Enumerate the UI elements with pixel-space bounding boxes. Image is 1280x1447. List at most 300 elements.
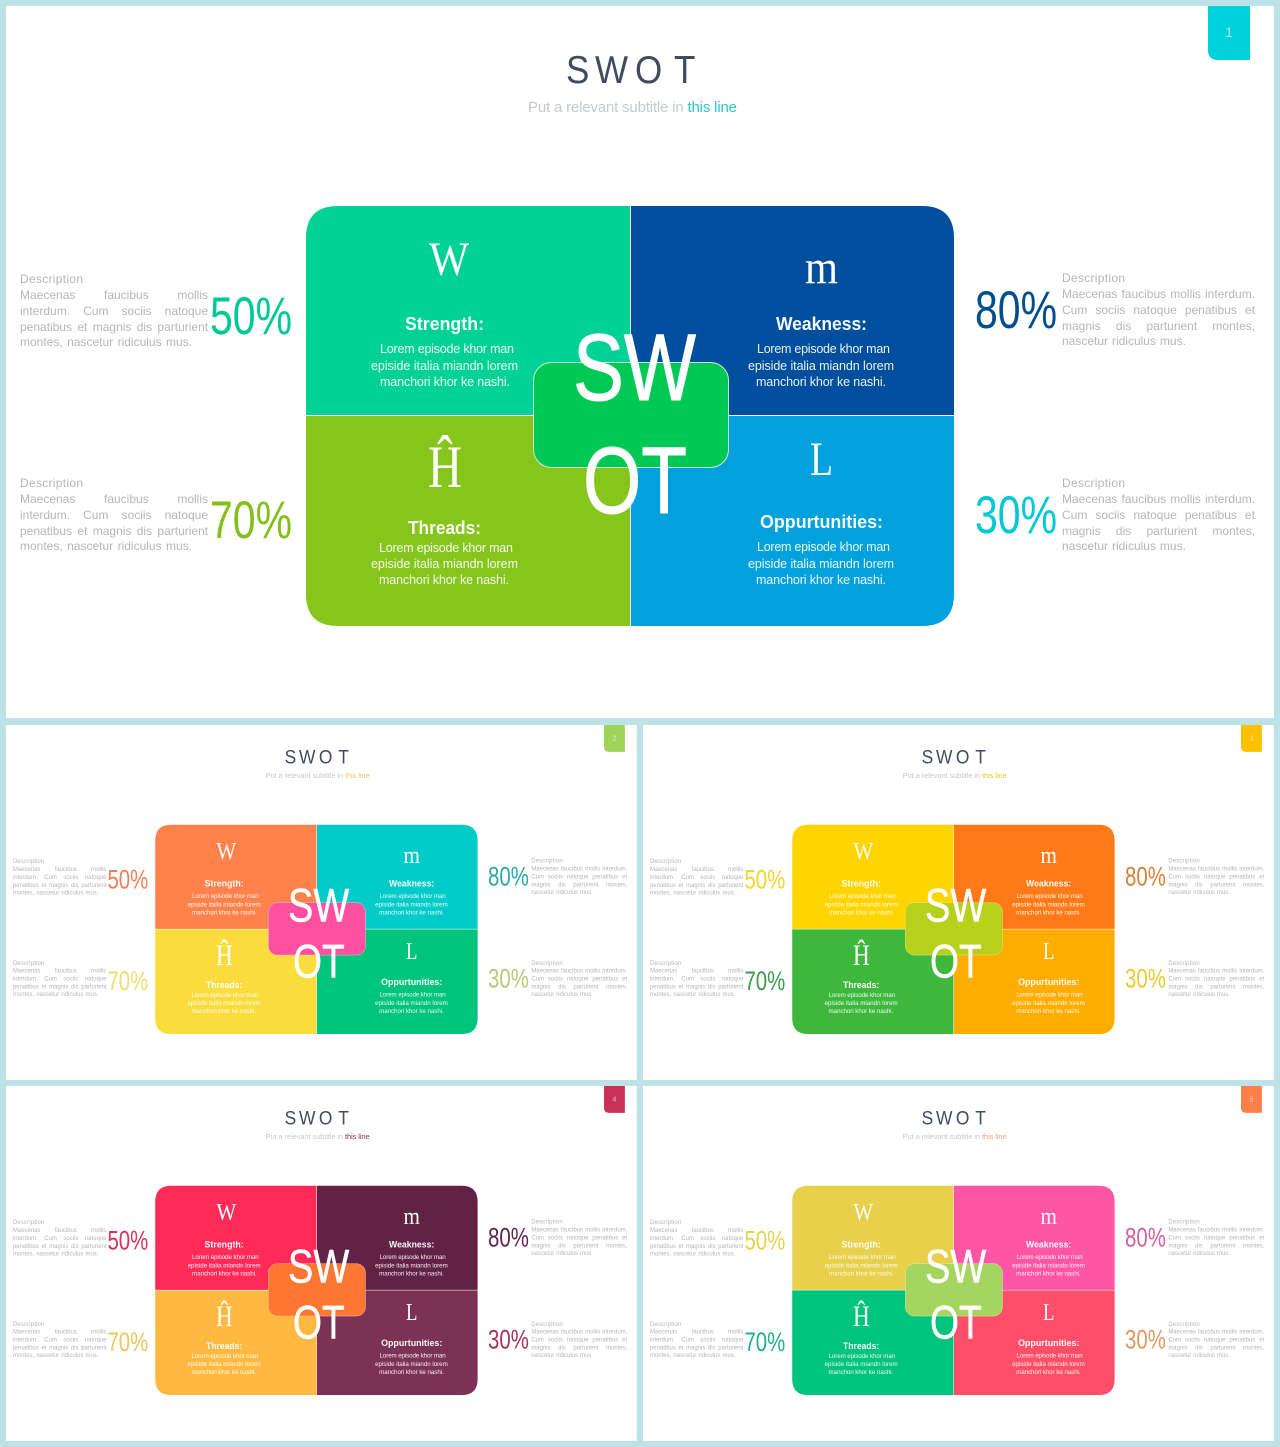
subtitle: Put a relevant subtitle in this line bbox=[528, 99, 737, 116]
center label SW OT bbox=[925, 1240, 987, 1350]
center label SW OT bbox=[925, 879, 987, 989]
page tab 5 bbox=[1241, 1086, 1262, 1113]
stat 30%: 30% bbox=[488, 964, 529, 994]
left description bottom: interdum. Cum sociis natoque bbox=[13, 977, 107, 983]
left description bottom: penatibus et magnis dis parturient bbox=[13, 985, 107, 991]
center label SW OT: SW bbox=[573, 315, 696, 421]
quadrant: strength: W bbox=[429, 233, 470, 286]
page tab 3 bbox=[1241, 725, 1262, 752]
page tab 1: 1 bbox=[1225, 24, 1233, 40]
left description bottom: Maecenas faucibus mollis bbox=[20, 492, 208, 506]
quadrant: strength: manchori khor ke nashi. bbox=[380, 375, 510, 389]
right description top: Cum sociis natoque penatibus et bbox=[531, 1236, 628, 1242]
quadrant: opportunities: Lorem episode khor man bbox=[380, 1353, 446, 1360]
left description bottom bbox=[20, 476, 209, 553]
stat 50%: 50% bbox=[107, 864, 148, 895]
right description top: Cum sociis natoque penatibus et bbox=[1168, 1236, 1265, 1242]
right description bottom: Maecenas faucibus mollis interdum. bbox=[531, 1330, 628, 1336]
quadrant: threads: Ĥ bbox=[428, 434, 462, 500]
quadrant: opportunities: manchori khor ke nashi. bbox=[1016, 1369, 1081, 1376]
right description top: Cum sociis natoque penatibus et bbox=[1168, 875, 1265, 881]
right description top: magnis dis parturient montes, bbox=[1168, 883, 1265, 889]
panel: slide 3 bbox=[643, 725, 1274, 1080]
subtitle: Put a relevant subtitle in this line bbox=[903, 771, 1007, 780]
quadrant: weakness: Lorem episode khor man bbox=[757, 342, 890, 356]
left description bottom: Description bbox=[13, 1322, 44, 1328]
right description bottom: Cum sociis natoque penatibus et bbox=[531, 977, 628, 983]
left description bottom: Description bbox=[20, 476, 83, 490]
right description bottom: nascetur ridiculus mus. bbox=[531, 1353, 593, 1359]
quadrant: threads: manchori khor ke nashi. bbox=[829, 1008, 893, 1015]
quadrant: weakness bbox=[631, 206, 954, 415]
right description bottom bbox=[1168, 1322, 1265, 1359]
right description top: nascetur ridiculus mus. bbox=[1168, 1251, 1230, 1257]
quadrant: weakness bbox=[954, 825, 1115, 929]
center label SW OT bbox=[288, 1240, 350, 1350]
right description top: magnis dis parturient montes, bbox=[531, 1244, 628, 1250]
quadrant: strength: Lorem episode khor man bbox=[829, 1254, 896, 1261]
left description bottom: montes, nascetur ridiculus mus. bbox=[13, 1353, 99, 1359]
panel: slide 2 bbox=[6, 725, 637, 1080]
quadrant: weakness: Weakness: bbox=[776, 314, 867, 334]
quadrant: strength: episide italia miandn lorem bbox=[825, 1262, 898, 1269]
right description top: nascetur ridiculus mus. bbox=[1062, 334, 1186, 348]
quadrant: strength: manchori khor ke nashi. bbox=[192, 1270, 257, 1277]
quadrant: strength: episide italia miandn lorem bbox=[188, 1262, 261, 1269]
left description bottom bbox=[13, 961, 107, 998]
quadrant: opportunities: manchori khor ke nashi. bbox=[1016, 1008, 1081, 1015]
left description bottom: montes, nascetur ridiculus mus. bbox=[20, 539, 192, 553]
stat 30%: 30% bbox=[488, 1325, 529, 1355]
right description bottom bbox=[1062, 476, 1256, 553]
quadrant: strength: manchori khor ke nashi. bbox=[829, 1270, 894, 1277]
left description bottom: montes, nascetur ridiculus mus. bbox=[13, 992, 99, 998]
quadrant: threads bbox=[792, 929, 953, 1034]
quadrant: opportunities: Lorem episode khor man bbox=[380, 992, 446, 999]
left description bottom bbox=[13, 1322, 107, 1359]
quadrant: opportunities: L bbox=[1043, 939, 1054, 965]
right description bottom bbox=[1168, 961, 1265, 998]
right description top: Description bbox=[531, 859, 563, 865]
quadrant: strength bbox=[792, 1186, 953, 1290]
quadrant: threads: manchori khor ke nashi. bbox=[379, 573, 509, 587]
right description top: Maecenas faucibus mollis interdum. bbox=[531, 867, 628, 873]
quadrant: strength: episide italia miandn lorem bbox=[188, 901, 261, 908]
left description top: interdum. Cum sociis natoque bbox=[650, 875, 744, 881]
stat 50%: 50% bbox=[210, 287, 292, 346]
panel: slide 4 bbox=[6, 1086, 637, 1441]
left description top bbox=[13, 859, 107, 896]
left description bottom: Maecenas faucibus mollis bbox=[650, 969, 743, 975]
center label SW OT: OT bbox=[930, 1297, 982, 1350]
center label SW OT: SW bbox=[925, 1240, 987, 1293]
quadrant: weakness: episide italia miandn lorem bbox=[1012, 901, 1085, 908]
quadrant: strength: Lorem episode khor man bbox=[192, 1254, 259, 1261]
left description top: interdum. Cum sociis natoque bbox=[13, 1236, 107, 1242]
right description top: Description bbox=[1168, 859, 1200, 865]
right description bottom: nascetur ridiculus mus. bbox=[1168, 1353, 1230, 1359]
quadrant: opportunities: L bbox=[406, 939, 417, 965]
right description top: magnis dis parturient montes, bbox=[1168, 1244, 1265, 1250]
stat 30%: 30% bbox=[975, 486, 1057, 545]
stat 70%: 70% bbox=[107, 1327, 148, 1357]
quadrant: threads: Lorem episode khor man bbox=[192, 992, 259, 999]
quadrant: opportunities: manchori khor ke nashi. bbox=[756, 573, 886, 587]
left description top bbox=[650, 859, 744, 896]
quadrant: strength: Lorem episode khor man bbox=[380, 342, 514, 356]
left description top bbox=[650, 1220, 744, 1257]
quadrant: weakness bbox=[954, 1186, 1115, 1290]
stat 80%: 80% bbox=[488, 1222, 529, 1253]
left description top: interdum. Cum sociis natoque bbox=[13, 875, 107, 881]
quadrant: weakness: Weakness: bbox=[1026, 1239, 1071, 1250]
quadrant: threads: manchori khor ke nashi. bbox=[829, 1369, 893, 1376]
quadrant: weakness: episide italia miandn lorem bbox=[1012, 1262, 1085, 1269]
quadrant: opportunities: Lorem episode khor man bbox=[1017, 992, 1083, 999]
right description bottom: Description bbox=[1168, 961, 1200, 967]
quadrant: opportunities bbox=[954, 929, 1115, 1034]
right description bottom: Description bbox=[531, 961, 563, 967]
quadrant: strength: Strength: bbox=[204, 878, 244, 889]
center badge bbox=[534, 362, 728, 468]
stat 70%: 70% bbox=[210, 491, 292, 550]
right description top: Description bbox=[1062, 271, 1125, 285]
page tab 4: 4 bbox=[612, 1096, 616, 1103]
left description top: penatibus et magnis dis parturient bbox=[13, 1244, 107, 1250]
right description bottom: Maecenas faucibus mollis interdum. bbox=[1168, 1330, 1265, 1336]
quadrant: threads bbox=[155, 1290, 316, 1395]
quadrant: threads: episide italia miandn lorem bbox=[188, 1361, 261, 1368]
quadrant: weakness bbox=[317, 1186, 478, 1290]
center badge bbox=[268, 1264, 365, 1316]
stat 50%: 50% bbox=[107, 1225, 148, 1256]
left description bottom bbox=[650, 961, 744, 998]
title: S W O T bbox=[285, 1107, 349, 1129]
right description top bbox=[1168, 859, 1265, 896]
stat 50%: 50% bbox=[744, 864, 785, 895]
quadrant: weakness: episide italia miandn lorem bbox=[375, 901, 448, 908]
quadrant: weakness: Weakness: bbox=[1026, 878, 1071, 889]
center label SW OT: OT bbox=[930, 936, 982, 989]
quadrant: strength: Strength: bbox=[204, 1239, 244, 1250]
right description top bbox=[1168, 1220, 1265, 1257]
left description top bbox=[13, 1220, 107, 1257]
left description top: penatibus et magnis dis parturient bbox=[650, 883, 744, 889]
quadrant: strength: W bbox=[216, 1200, 237, 1226]
quadrant: opportunities: episide italia miandn lorem bbox=[1012, 1361, 1085, 1368]
quadrant: opportunities: L bbox=[810, 433, 833, 486]
quadrant: threads: Lorem episode khor man bbox=[192, 1353, 259, 1360]
title: S W O T bbox=[566, 48, 695, 91]
center label SW OT bbox=[288, 879, 350, 989]
quadrant: weakness: Lorem episode khor man bbox=[380, 1254, 446, 1261]
left description top: Maecenas faucibus mollis bbox=[20, 288, 208, 302]
stat 70%: 70% bbox=[744, 1327, 785, 1357]
quadrant: opportunities bbox=[954, 1290, 1115, 1395]
quadrant: strength: manchori khor ke nashi. bbox=[829, 909, 894, 916]
quadrant: threads: manchori khor ke nashi. bbox=[192, 1008, 256, 1015]
left description top: Maecenas faucibus mollis bbox=[650, 867, 743, 873]
quadrant: strength: Lorem episode khor man bbox=[192, 893, 259, 900]
right description top bbox=[531, 1220, 628, 1257]
right description top bbox=[1062, 271, 1256, 348]
quadrant: threads bbox=[792, 1290, 953, 1395]
left description top: Description bbox=[650, 1220, 681, 1226]
quadrant: opportunities: Oppurtunities: bbox=[381, 1338, 442, 1348]
stat 30%: 30% bbox=[1125, 964, 1166, 994]
quadrant: threads: episide italia miandn lorem bbox=[825, 1361, 898, 1368]
page tab 2 bbox=[604, 725, 625, 752]
left description bottom: penatibus et magnis dis parturient bbox=[20, 524, 209, 538]
right description bottom: Maecenas faucibus mollis interdum. bbox=[1168, 969, 1265, 975]
quadrant: opportunities: episide italia miandn lorem bbox=[375, 1361, 448, 1368]
left description bottom: Maecenas faucibus mollis bbox=[650, 1330, 743, 1336]
quadrant: weakness: m bbox=[1040, 1204, 1057, 1230]
left description top: montes, nascetur ridiculus mus. bbox=[650, 890, 736, 896]
left description top: penatibus et magnis dis parturient bbox=[20, 320, 209, 334]
right description bottom: Maecenas faucibus mollis interdum. bbox=[531, 969, 628, 975]
center label SW OT bbox=[573, 315, 696, 534]
stat 80%: 80% bbox=[1125, 861, 1166, 892]
quadrant: weakness: Weakness: bbox=[389, 878, 434, 889]
left description bottom: interdum. Cum sociis natoque bbox=[650, 1338, 744, 1344]
quadrant: weakness: Lorem episode khor man bbox=[380, 893, 446, 900]
right description bottom: magnis dis parturient montes, bbox=[531, 985, 628, 991]
left description top: montes, nascetur ridiculus mus. bbox=[13, 1251, 99, 1257]
right description bottom: magnis dis parturient montes, bbox=[1168, 1346, 1265, 1352]
subtitle: Put a relevant subtitle in this line bbox=[266, 771, 370, 780]
quadrant: threads: episide italia miandn lorem bbox=[188, 1000, 261, 1007]
quadrant: opportunities: episide italia miandn lorem bbox=[748, 557, 894, 571]
right description top: nascetur ridiculus mus. bbox=[531, 1251, 593, 1257]
quadrant: threads: Lorem episode khor man bbox=[379, 541, 513, 555]
left description top: interdum. Cum sociis natoque bbox=[20, 304, 208, 318]
quadrant: weakness: manchori khor ke nashi. bbox=[1016, 1270, 1081, 1277]
stat 80%: 80% bbox=[1125, 1222, 1166, 1253]
left description bottom bbox=[650, 1322, 744, 1359]
right description bottom: Description bbox=[1168, 1322, 1200, 1328]
center label SW OT: OT bbox=[293, 1297, 345, 1350]
right description bottom bbox=[531, 1322, 628, 1359]
quadrant: weakness: episide italia miandn lorem bbox=[375, 1262, 448, 1269]
right description top: Maecenas faucibus mollis interdum. bbox=[531, 1228, 628, 1234]
right description bottom bbox=[531, 961, 628, 998]
quadrant: strength: episide italia miandn lorem bbox=[825, 901, 898, 908]
right description top: Cum sociis natoque penatibus et bbox=[1062, 303, 1256, 317]
quadrant: opportunities: Oppurtunities: bbox=[1018, 1338, 1079, 1348]
center label SW OT: OT bbox=[293, 936, 345, 989]
left description top: Maecenas faucibus mollis bbox=[13, 1228, 106, 1234]
stat 30%: 30% bbox=[1125, 1325, 1166, 1355]
center label SW OT: OT bbox=[583, 428, 687, 534]
subtitle: Put a relevant subtitle in this line bbox=[903, 1132, 1007, 1141]
right description bottom: Cum sociis natoque penatibus et bbox=[1168, 977, 1265, 983]
right description bottom: Cum sociis natoque penatibus et bbox=[531, 1338, 628, 1344]
center badge bbox=[268, 903, 365, 955]
left description top: montes, nascetur ridiculus mus. bbox=[13, 890, 99, 896]
quadrant: strength bbox=[155, 825, 316, 929]
quadrant: threads: Threads: bbox=[206, 1341, 242, 1351]
left description bottom: interdum. Cum sociis natoque bbox=[650, 977, 744, 983]
quadrant: strength: Strength: bbox=[841, 1239, 881, 1250]
left description bottom: penatibus et magnis dis parturient bbox=[650, 985, 744, 991]
left description top: Description bbox=[13, 1220, 44, 1226]
page tab 1 bbox=[1208, 6, 1250, 60]
left description bottom: penatibus et magnis dis parturient bbox=[650, 1346, 744, 1352]
left description bottom: interdum. Cum sociis natoque bbox=[20, 508, 208, 522]
quadrant: strength: manchori khor ke nashi. bbox=[192, 909, 257, 916]
right description bottom: magnis dis parturient montes, bbox=[1062, 524, 1255, 538]
quadrant: strength: Lorem episode khor man bbox=[829, 893, 896, 900]
quadrant: threads: Threads: bbox=[843, 980, 879, 990]
page tab 4 bbox=[604, 1086, 625, 1113]
left description top: montes, nascetur ridiculus mus. bbox=[650, 1251, 736, 1257]
quadrant: weakness: Weakness: bbox=[389, 1239, 434, 1250]
quadrant: strength: Strength: bbox=[841, 878, 881, 889]
quadrant: weakness: manchori khor ke nashi. bbox=[756, 375, 886, 389]
right description bottom: Cum sociis natoque penatibus et bbox=[1168, 1338, 1265, 1344]
quadrant: opportunities: Oppurtunities: bbox=[381, 977, 442, 987]
center label SW OT: SW bbox=[925, 879, 987, 932]
center badge bbox=[905, 1264, 1002, 1316]
quadrant: opportunities: Oppurtunities: bbox=[1018, 977, 1079, 987]
quadrant: threads: Threads: bbox=[408, 518, 481, 538]
quadrant: opportunities: manchori khor ke nashi. bbox=[379, 1369, 444, 1376]
left description bottom: Description bbox=[650, 1322, 681, 1328]
quadrant: strength bbox=[306, 206, 630, 415]
left description bottom: penatibus et magnis dis parturient bbox=[13, 1346, 107, 1352]
right description top: Maecenas faucibus mollis interdum. bbox=[1168, 867, 1265, 873]
quadrant: threads: Ĥ bbox=[853, 1300, 870, 1333]
quadrant: opportunities: episide italia miandn lorem bbox=[375, 1000, 448, 1007]
quadrant: threads: episide italia miandn lorem bbox=[825, 1000, 898, 1007]
quadrant: strength: W bbox=[853, 1200, 874, 1226]
right description bottom: nascetur ridiculus mus. bbox=[1168, 992, 1230, 998]
quadrant: opportunities: episide italia miandn lorem bbox=[1012, 1000, 1085, 1007]
left description bottom: montes, nascetur ridiculus mus. bbox=[650, 992, 736, 998]
quadrant: weakness bbox=[317, 825, 478, 929]
left description bottom: interdum. Cum sociis natoque bbox=[13, 1338, 107, 1344]
left description bottom: Description bbox=[650, 961, 681, 967]
quadrant: threads: Threads: bbox=[843, 1341, 879, 1351]
quadrant: threads: manchori khor ke nashi. bbox=[192, 1369, 256, 1376]
quadrant: threads: Threads: bbox=[206, 980, 242, 990]
quadrant: strength: W bbox=[853, 839, 874, 865]
quadrant: opportunities bbox=[317, 929, 478, 1034]
right description bottom: nascetur ridiculus mus. bbox=[531, 992, 593, 998]
left description bottom: montes, nascetur ridiculus mus. bbox=[650, 1353, 736, 1359]
right description bottom: nascetur ridiculus mus. bbox=[1062, 539, 1186, 553]
right description top: Cum sociis natoque penatibus et bbox=[531, 875, 628, 881]
left description top: Description bbox=[650, 859, 681, 865]
right description bottom: magnis dis parturient montes, bbox=[531, 1346, 628, 1352]
quadrant: opportunities bbox=[317, 1290, 478, 1395]
quadrant: opportunities bbox=[631, 416, 954, 626]
quadrant: weakness: manchori khor ke nashi. bbox=[379, 1270, 444, 1277]
right description top bbox=[531, 859, 628, 896]
quadrant: opportunities: L bbox=[406, 1300, 417, 1326]
left description top bbox=[20, 272, 209, 349]
right description top: Maecenas faucibus mollis interdum. bbox=[1062, 287, 1255, 301]
panel: slide 5 bbox=[643, 1086, 1274, 1441]
left description top: interdum. Cum sociis natoque bbox=[650, 1236, 744, 1242]
left description top: penatibus et magnis dis parturient bbox=[650, 1244, 744, 1250]
quadrant: opportunities: Oppurtunities: bbox=[760, 512, 883, 532]
left description top: Description bbox=[13, 859, 44, 865]
center label SW OT: SW bbox=[288, 1240, 350, 1293]
right description bottom: Maecenas faucibus mollis interdum. bbox=[1062, 492, 1255, 506]
quadrant: weakness: m bbox=[403, 843, 420, 869]
quadrant: weakness: manchori khor ke nashi. bbox=[379, 909, 444, 916]
quadrant: weakness: Lorem episode khor man bbox=[1017, 893, 1083, 900]
center label SW OT: SW bbox=[288, 879, 350, 932]
right description top: nascetur ridiculus mus. bbox=[1168, 890, 1230, 896]
subtitle: Put a relevant subtitle in this line bbox=[266, 1132, 370, 1141]
stat 70%: 70% bbox=[107, 966, 148, 996]
left description bottom: Description bbox=[13, 961, 44, 967]
quadrant: weakness: manchori khor ke nashi. bbox=[1016, 909, 1081, 916]
quadrant: threads: Ĥ bbox=[216, 1300, 233, 1333]
page tab 3: 3 bbox=[1249, 735, 1253, 742]
quadrant: threads: Lorem episode khor man bbox=[829, 992, 896, 999]
right description bottom: Cum sociis natoque penatibus et bbox=[1062, 508, 1256, 522]
quadrant: strength: W bbox=[216, 839, 237, 865]
left description top: Maecenas faucibus mollis bbox=[13, 867, 106, 873]
left description top: montes, nascetur ridiculus mus. bbox=[20, 335, 192, 349]
quadrant: weakness: episide italia miandn lorem bbox=[748, 359, 894, 373]
quadrant: threads bbox=[155, 929, 316, 1034]
quadrant: threads bbox=[306, 416, 630, 626]
quadrant: strength: Strength: bbox=[405, 314, 484, 334]
left description top: Description bbox=[20, 272, 83, 286]
right description top: Description bbox=[531, 1220, 563, 1226]
quadrant: weakness: Lorem episode khor man bbox=[1017, 1254, 1083, 1261]
left description top: penatibus et magnis dis parturient bbox=[13, 883, 107, 889]
quadrant: weakness: m bbox=[1040, 843, 1057, 869]
stat 80%: 80% bbox=[975, 281, 1057, 340]
quadrant: weakness: m bbox=[403, 1204, 420, 1230]
quadrant: threads: episide italia miandn lorem bbox=[371, 557, 518, 571]
stat 50%: 50% bbox=[744, 1225, 785, 1256]
right description top: Maecenas faucibus mollis interdum. bbox=[1168, 1228, 1265, 1234]
title: S W O T bbox=[922, 1107, 986, 1129]
quadrant: opportunities: Lorem episode khor man bbox=[1017, 1353, 1083, 1360]
center badge bbox=[905, 903, 1002, 955]
quadrant: opportunities: L bbox=[1043, 1300, 1054, 1326]
right description bottom: Description bbox=[531, 1322, 563, 1328]
title: S W O T bbox=[922, 746, 986, 768]
left description bottom: Maecenas faucibus mollis bbox=[13, 969, 106, 975]
page tab 5: 5 bbox=[1249, 1096, 1253, 1103]
quadrant: opportunities: Lorem episode khor man bbox=[757, 540, 890, 554]
stat 70%: 70% bbox=[744, 966, 785, 996]
quadrant: threads: Lorem episode khor man bbox=[829, 1353, 896, 1360]
stat 80%: 80% bbox=[488, 861, 529, 892]
quadrant: threads: Ĥ bbox=[853, 939, 870, 972]
panel: slide 1 bbox=[6, 6, 1274, 718]
quadrant: opportunities: manchori khor ke nashi. bbox=[379, 1008, 444, 1015]
quadrant: strength bbox=[792, 825, 953, 929]
quadrant: strength bbox=[155, 1186, 316, 1290]
page tab 2: 2 bbox=[612, 735, 616, 742]
left description bottom: Maecenas faucibus mollis bbox=[13, 1330, 106, 1336]
quadrant: strength: episide italia miandn lorem bbox=[371, 359, 518, 373]
right description top: magnis dis parturient montes, bbox=[531, 883, 628, 889]
left description top: Maecenas faucibus mollis bbox=[650, 1228, 743, 1234]
right description top: magnis dis parturient montes, bbox=[1062, 319, 1255, 333]
right description top: nascetur ridiculus mus. bbox=[531, 890, 593, 896]
title: S W O T bbox=[285, 746, 349, 768]
